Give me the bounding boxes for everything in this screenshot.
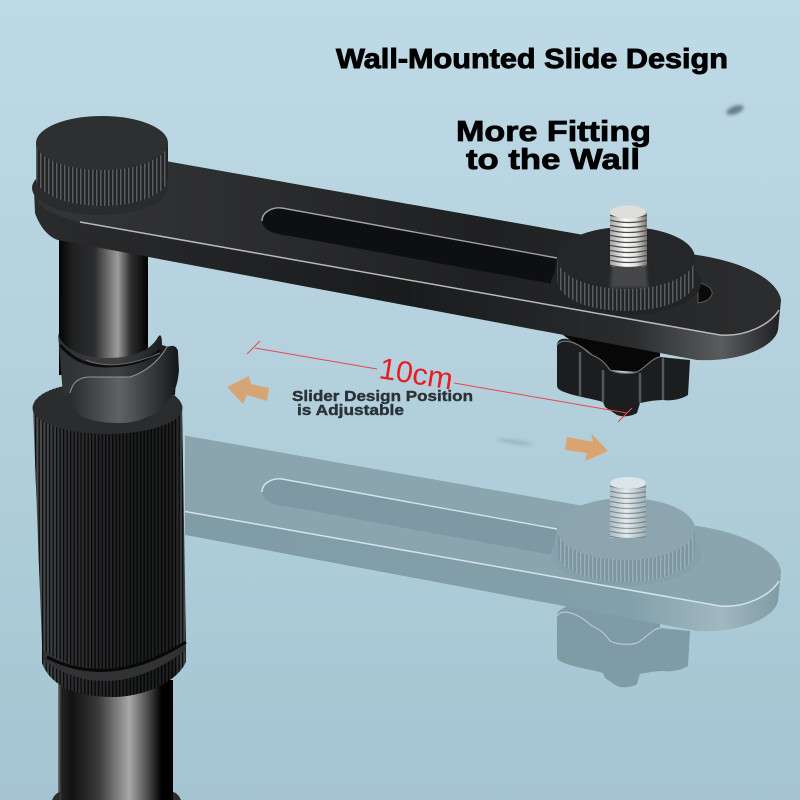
arm side bbox=[34, 190, 781, 360]
grip top face bbox=[32, 382, 182, 434]
upper pole bbox=[59, 235, 148, 375]
reflected slide arm bbox=[185, 436, 781, 688]
reflected nut bbox=[592, 582, 604, 585]
slider caption: is Adjustable bbox=[297, 403, 404, 419]
arrow: left bbox=[227, 376, 269, 404]
subheading: More Fitting bbox=[456, 116, 651, 148]
slot bbox=[262, 208, 557, 284]
base hint bbox=[52, 792, 181, 800]
reflected star knob bbox=[557, 606, 690, 687]
reflected slot bbox=[262, 479, 557, 555]
reflected arm surface bbox=[34, 421, 781, 606]
grip groove bbox=[43, 640, 186, 681]
measurement line bbox=[247, 341, 632, 422]
threaded bolt and nut bbox=[551, 206, 701, 315]
reflected arm side bbox=[185, 512, 781, 686]
lower pole bbox=[58, 680, 173, 800]
heading: Wall-Mounted Slide Design bbox=[336, 43, 728, 74]
smudges bbox=[497, 103, 745, 446]
slide arm bbox=[34, 150, 781, 360]
reflected bolt bbox=[610, 482, 646, 538]
arrow: right bbox=[565, 433, 608, 461]
slot end bbox=[698, 283, 712, 303]
collar clip bbox=[58, 333, 179, 423]
arm surface bbox=[34, 150, 781, 335]
top knob bbox=[32, 116, 168, 215]
slider caption: Slider Design Position bbox=[292, 389, 473, 405]
10cm label: 10cm bbox=[377, 352, 455, 396]
subheading: to the Wall bbox=[466, 144, 640, 176]
knurled grip bbox=[32, 382, 186, 697]
star knob bbox=[557, 335, 690, 416]
